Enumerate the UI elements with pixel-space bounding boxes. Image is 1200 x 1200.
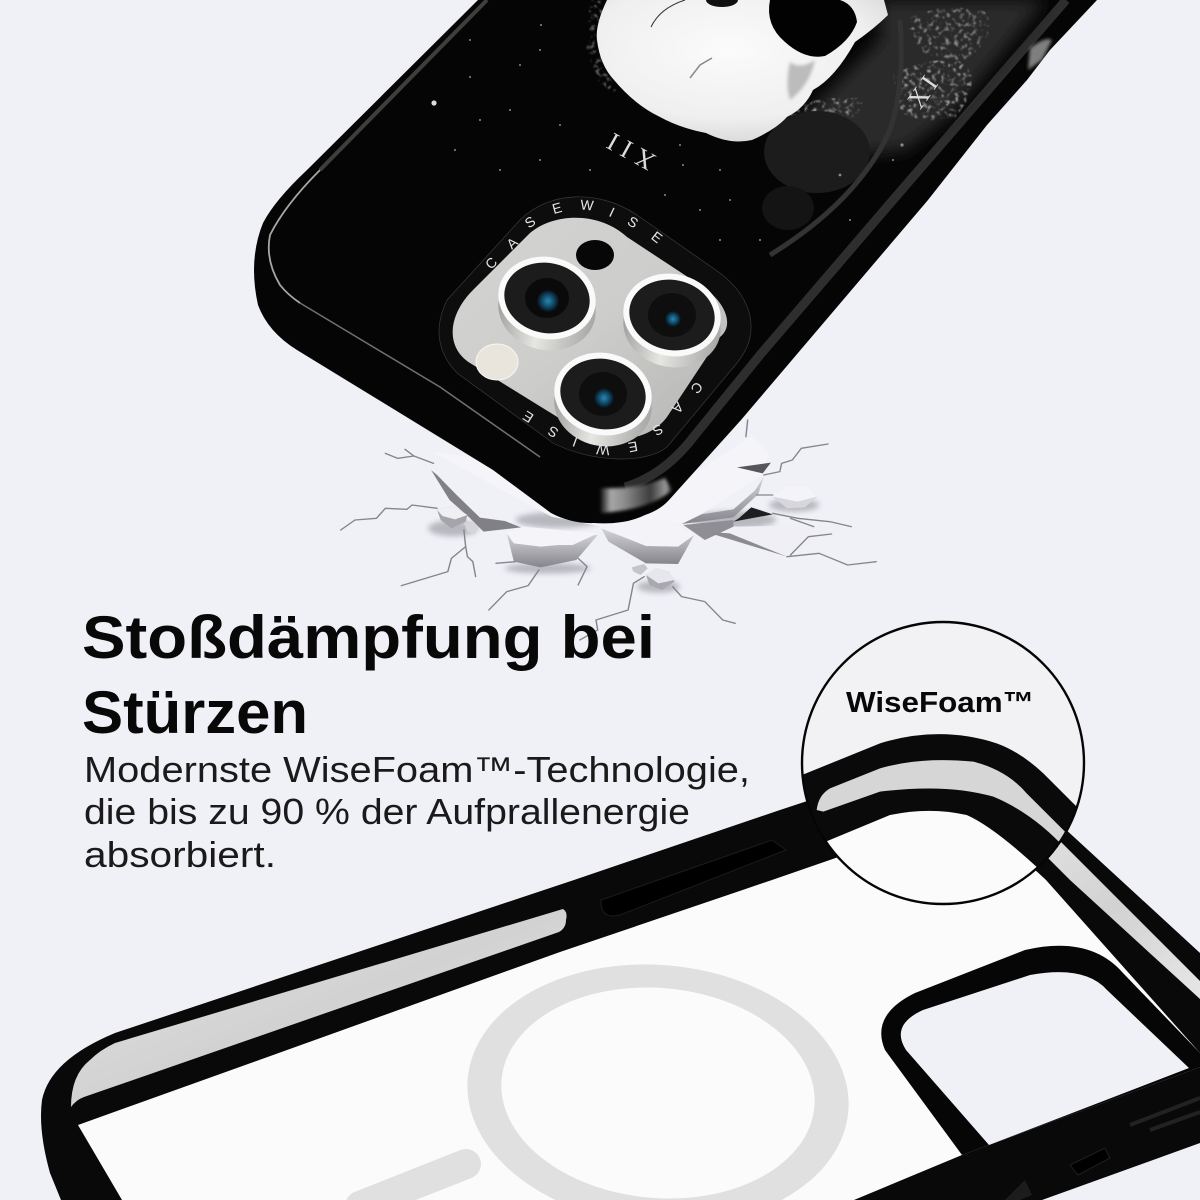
brand ring text bottom: S <box>650 421 666 439</box>
dark circles <box>764 111 870 193</box>
brand ring text top: S <box>625 213 641 231</box>
brand ring text top: S <box>522 213 538 231</box>
numeral XI: XI <box>901 66 947 114</box>
lens 2 <box>616 265 728 376</box>
long side slot <box>71 909 567 1107</box>
body text: absorbiert. <box>84 834 276 875</box>
skull nose shadow <box>706 0 738 7</box>
side button <box>1028 39 1052 70</box>
camera plate <box>453 218 727 440</box>
camera bump <box>439 196 751 459</box>
rim highlight <box>600 478 672 513</box>
smoke speckles <box>893 60 972 120</box>
body text <box>84 749 750 875</box>
body text: Modernste WiseFoam™-Technologie, <box>84 749 750 790</box>
brand ring text bottom: E <box>627 438 639 456</box>
camera cutout frame <box>881 946 1200 1155</box>
stars <box>431 24 904 241</box>
brand ring text top: E <box>648 228 666 246</box>
soft shadows around the rubble <box>428 498 819 593</box>
skull <box>597 0 888 141</box>
brand ring text bottom: E <box>520 408 536 426</box>
brand ring text bottom: W <box>595 441 610 459</box>
magnified frame corner <box>804 734 1076 902</box>
skull eye socket <box>769 0 857 57</box>
brand ring text bottom: I <box>570 434 580 450</box>
brand ring text top: C <box>482 254 500 272</box>
crack plates <box>432 437 769 527</box>
brand ring text top: A <box>503 233 521 252</box>
numeral XII: XII <box>596 123 660 177</box>
clear case frame <box>41 768 1200 1200</box>
rubble chunk centre <box>601 520 694 564</box>
lens 1 <box>491 248 603 359</box>
brand ring text top: E <box>550 199 564 217</box>
alignment pill <box>360 1164 466 1200</box>
heading: Stoßdämpfung bei <box>82 604 655 671</box>
glossy rim lines <box>320 0 487 170</box>
small stones <box>437 485 817 590</box>
lens 3 <box>547 344 659 455</box>
short side slot <box>1020 821 1200 999</box>
lower side buttons <box>1005 1180 1032 1200</box>
rubble chunk left <box>507 527 598 567</box>
magnifier label: WiseFoam™ <box>846 687 1034 719</box>
brand ring text bottom: S <box>545 423 561 441</box>
brand ring text top <box>482 196 666 272</box>
case body <box>254 0 1097 523</box>
cracked ground impact <box>341 420 876 640</box>
crack walls <box>431 470 521 532</box>
brand ring text bottom: C <box>688 379 706 397</box>
phone with black case, seen from back <box>254 0 1097 523</box>
skull details <box>651 0 685 27</box>
black frame outer <box>41 768 1200 1200</box>
crack lines <box>341 420 876 640</box>
heading <box>82 604 655 746</box>
heading: Stürzen <box>82 679 308 746</box>
brand ring text top: W <box>580 196 595 214</box>
flash <box>476 344 518 380</box>
brand ring text top: I <box>607 204 617 220</box>
magnifier callout: WiseFoam <box>800 620 1086 906</box>
camera cutout opening <box>901 972 1189 1145</box>
dark smoke behind the skull <box>790 0 1045 155</box>
body text: die bis zu 90 % der Aufprallenergie <box>84 791 690 832</box>
microphone cutout <box>576 240 614 270</box>
side button <box>601 840 786 916</box>
frame highlight <box>1130 1098 1200 1130</box>
arc <box>770 20 901 255</box>
magnetic ring <box>456 949 860 1200</box>
clear back panel <box>78 834 1200 1200</box>
brand ring text bottom <box>520 379 706 459</box>
brand ring text bottom: A <box>669 399 687 417</box>
